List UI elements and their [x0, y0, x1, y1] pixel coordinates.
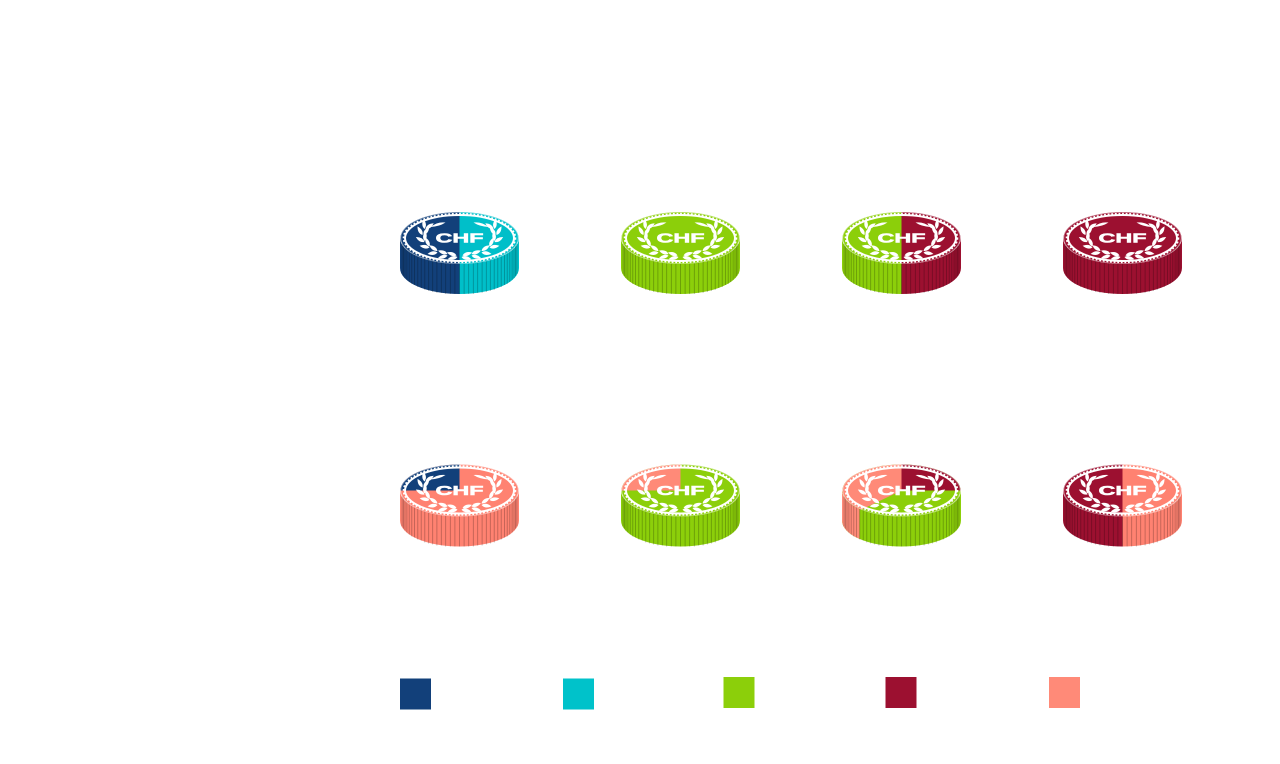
legend swatches — [400, 677, 1080, 710]
coin: crimson — [1063, 212, 1182, 294]
coin: crimson and salmon — [1062, 464, 1182, 546]
legend swatch: cyan — [563, 678, 594, 710]
coin: salmon with navy quarter: CHF — [436, 483, 484, 498]
coin: green with salmon quarter — [620, 464, 740, 546]
coin: green — [621, 212, 740, 294]
coin: salmon with navy quarter — [400, 464, 520, 546]
legend swatch: crimson — [886, 677, 916, 708]
coin: green: CHF — [656, 230, 705, 245]
coin: navy and cyan — [400, 211, 520, 294]
coin: salmon, crimson and green: CHF — [878, 483, 926, 498]
coin: green and crimson — [842, 211, 962, 294]
legend swatch: navy — [400, 678, 431, 710]
legend swatch: salmon — [1049, 677, 1080, 708]
coin: green and crimson: CHF — [878, 230, 926, 245]
legend swatch: green — [724, 677, 754, 708]
coin: salmon, crimson and green — [842, 464, 962, 546]
coin: navy and cyan: CHF — [436, 230, 484, 245]
coin: crimson: CHF — [1098, 230, 1147, 245]
coin: crimson and salmon: CHF — [1098, 483, 1147, 498]
coin: green with salmon quarter: CHF — [656, 483, 705, 498]
